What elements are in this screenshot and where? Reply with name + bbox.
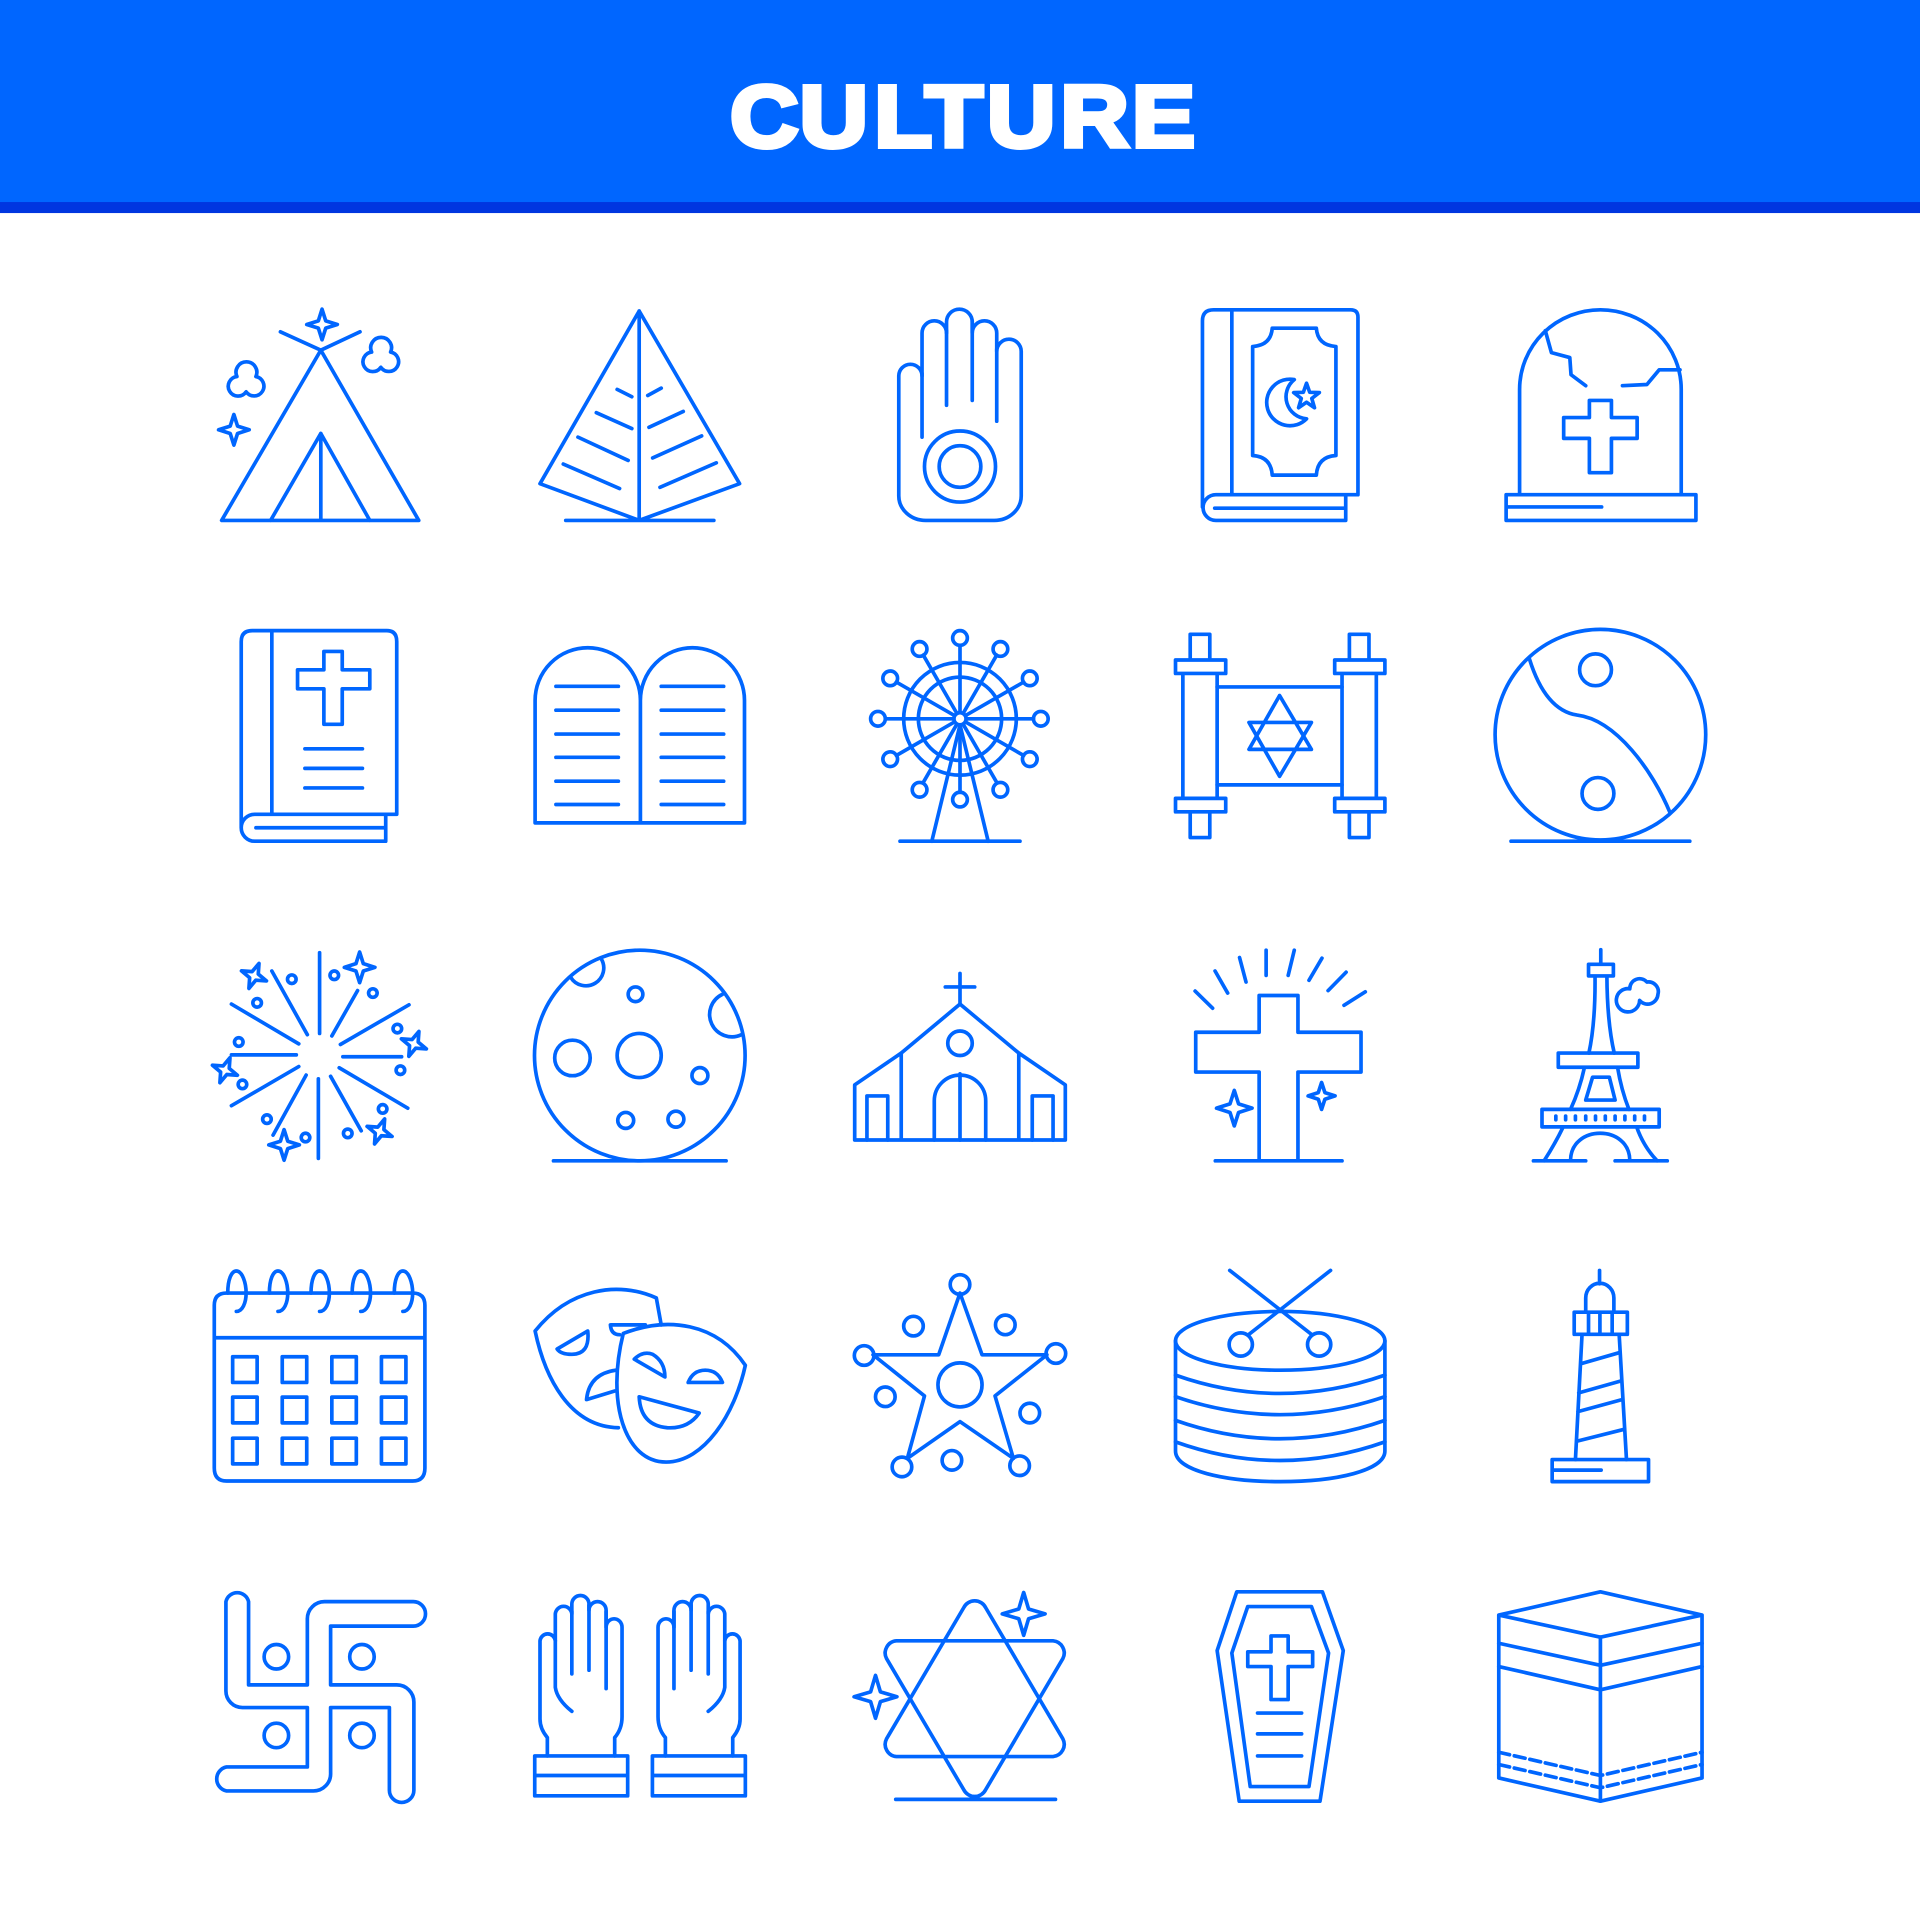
icon: moon [534,950,745,1161]
icon: church [855,973,1065,1140]
icon: swastika symbol [217,1593,426,1802]
icon: eiffel tower [1533,950,1667,1161]
icon: torah scroll [1176,634,1385,838]
icon: drum [1176,1270,1385,1482]
icon: theatre masks [535,1289,745,1462]
icon: praying hands [535,1596,745,1796]
icon: star of david [854,1592,1064,1799]
left hand [535,1596,628,1796]
icon: shining cross [1195,950,1365,1161]
icon: calendar [214,1271,425,1481]
icon: lighthouse [1552,1270,1649,1482]
icon: star with circles [854,1275,1066,1477]
header banner [0,0,1920,213]
icon: coffin [1217,1592,1343,1801]
icon: yin yang [1495,629,1706,841]
icon: fireworks [207,952,431,1160]
title: CULTURE [730,69,1195,165]
icon: ferris wheel [871,631,1048,841]
right hand [652,1596,745,1796]
icon: tent [219,309,419,520]
icon: tombstone [1506,310,1696,520]
icon: quran book [1202,310,1358,520]
icon grid [207,309,1706,1802]
icon: jain hand [899,309,1021,520]
icon: leaf pyramid [540,311,740,520]
icon: bible [241,631,397,841]
icon: kaaba [1499,1592,1702,1801]
icon: commandment tablets [535,648,744,823]
